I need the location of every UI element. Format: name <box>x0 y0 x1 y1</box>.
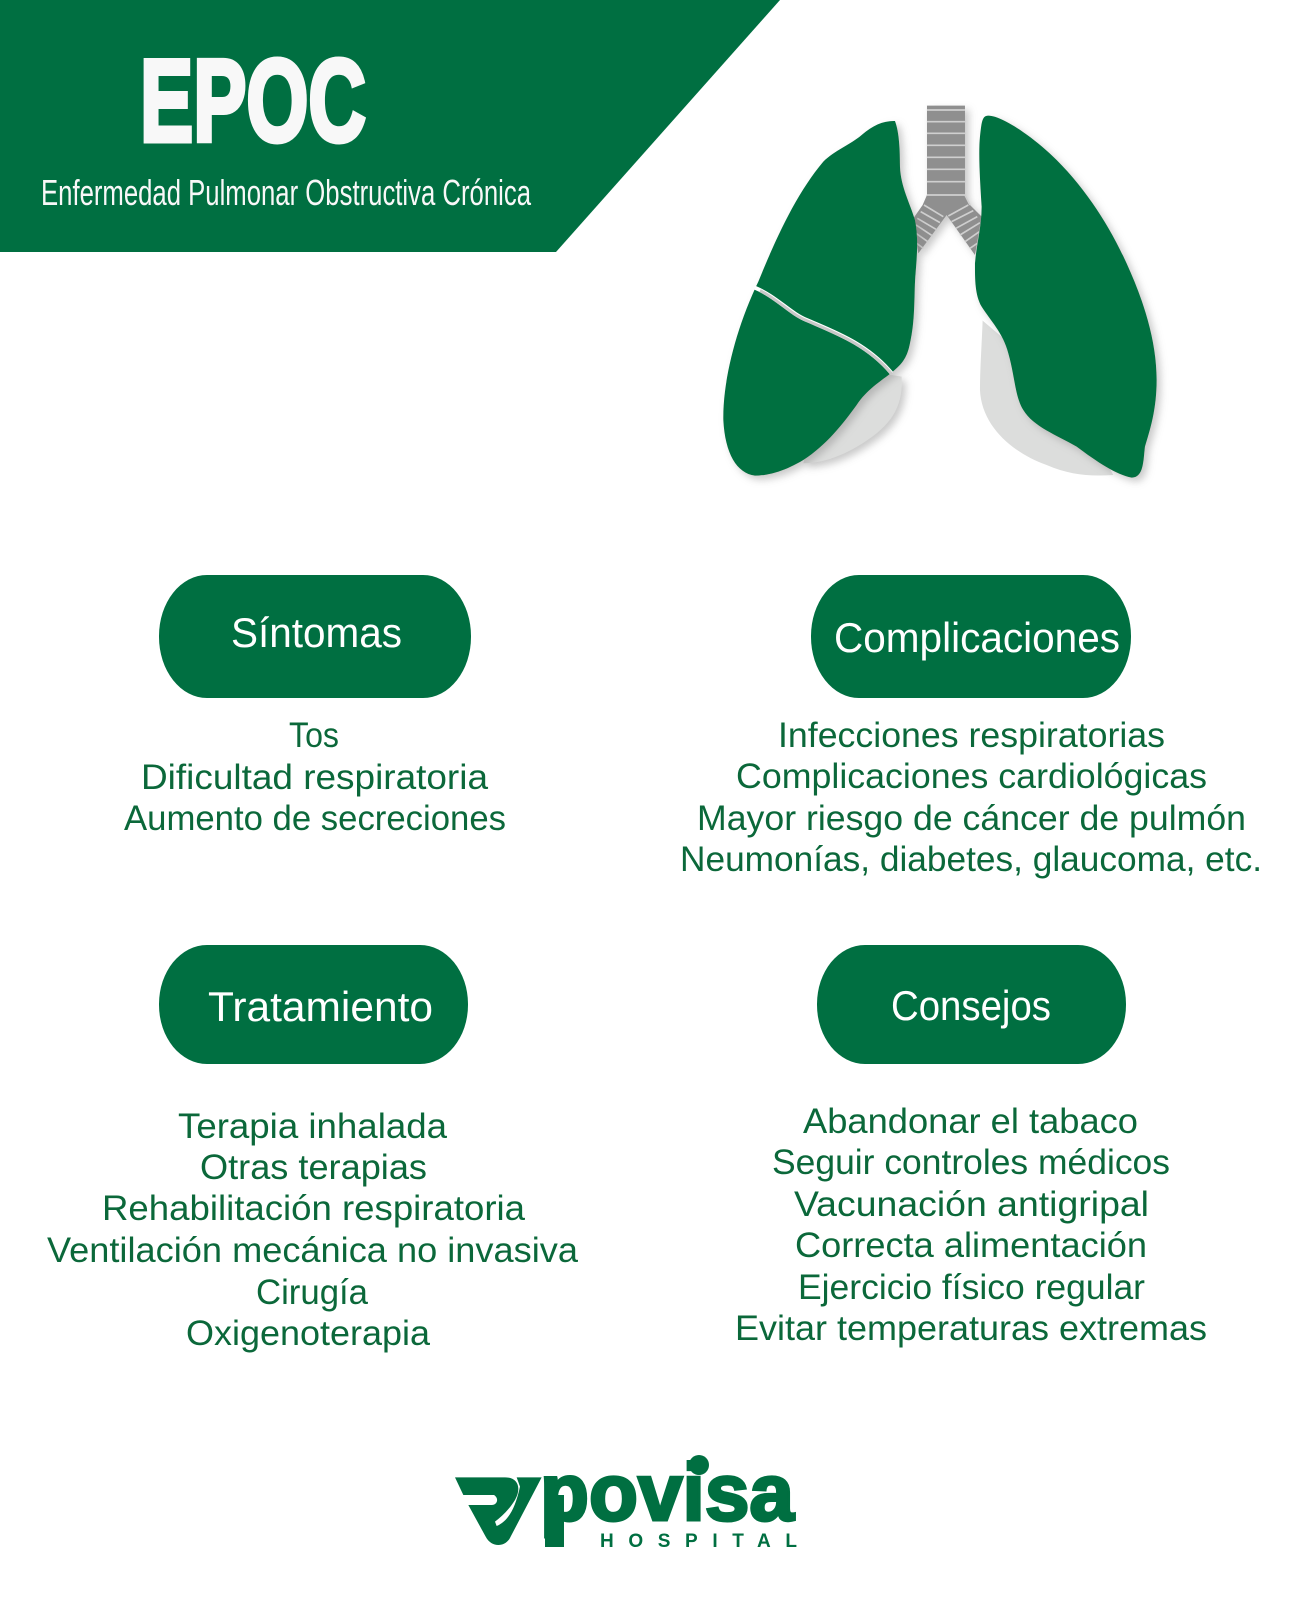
list: Síntomas: Dificultad respiratoria <box>141 758 489 797</box>
lungs illustration <box>723 106 1157 478</box>
list: Complicaciones: Neumonías, diabetes, glaucoma, etc. <box>680 840 1262 879</box>
list: Complicaciones: Infecciones respiratorias <box>778 716 1165 755</box>
list: Consejos: Seguir controles médicos <box>772 1143 1170 1182</box>
list: Consejos: Evitar temperaturas extremas <box>735 1309 1207 1348</box>
list: Tratamiento <box>47 1107 579 1353</box>
list: Consejos: Ejercicio físico regular <box>798 1268 1145 1307</box>
list: Síntomas: Aumento de secreciones <box>124 799 506 838</box>
list: Complicaciones: Complicaciones cardiológicas <box>736 757 1207 796</box>
pill: Consejos: Consejos <box>891 982 1051 1029</box>
logo wordmark: povisa <box>540 1448 795 1538</box>
title: EPOC <box>140 35 366 166</box>
trachea and bronchi <box>913 106 982 255</box>
list: Complicaciones: Mayor riesgo de cáncer de pulmón <box>697 799 1246 838</box>
pill: Complicaciones <box>811 575 1131 698</box>
list: Tratamiento: Terapia inhalada <box>178 1107 448 1146</box>
logo subtitle: HOSPITAL <box>600 1531 797 1552</box>
list: Tratamiento: Otras terapias <box>200 1148 427 1187</box>
list: Síntomas: Tos <box>289 716 339 755</box>
pill: Síntomas: Síntomas <box>231 609 402 656</box>
pill: Tratamiento: Tratamiento <box>208 983 433 1030</box>
list: Consejos: Vacunación antigripal <box>794 1185 1149 1224</box>
header banner <box>0 0 780 252</box>
lower lobe shadows <box>803 321 1113 476</box>
list: Consejos: Correcta alimentación <box>795 1226 1147 1265</box>
pill: Tratamiento <box>159 945 468 1064</box>
logo p stem <box>545 1495 564 1547</box>
logo dot <box>689 1455 709 1475</box>
list: Tratamiento: Cirugía <box>256 1273 369 1312</box>
list: Tratamiento: Rehabilitación respiratoria <box>102 1189 526 1228</box>
list: Tratamiento: Ventilación mecánica no invasiva <box>47 1231 579 1270</box>
subtitle: Enfermedad Pulmonar Obstructiva Crónica <box>41 172 532 213</box>
section: Síntomas <box>124 575 506 838</box>
list: Síntomas <box>124 716 506 838</box>
pill: Síntomas <box>159 575 471 698</box>
list: Tratamiento: Oxigenoterapia <box>186 1314 431 1353</box>
list: Consejos <box>735 1102 1207 1348</box>
list: Complicaciones <box>680 716 1262 879</box>
pill: Complicaciones: Complicaciones <box>834 614 1120 661</box>
section: Complicaciones <box>680 575 1262 879</box>
left lung <box>723 121 917 476</box>
section: Tratamiento <box>47 945 579 1353</box>
logo: Povisa Hospital <box>455 1448 797 1552</box>
section: Consejos <box>735 945 1207 1348</box>
list: Consejos: Abandonar el tabaco <box>803 1102 1138 1141</box>
logo mark <box>455 1477 542 1545</box>
pill: Consejos <box>817 945 1126 1064</box>
right lung <box>975 116 1157 478</box>
